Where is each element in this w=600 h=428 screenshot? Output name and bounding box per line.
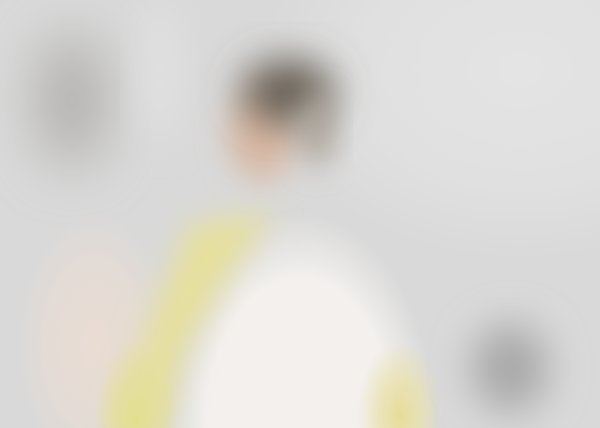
face bbox=[228, 89, 296, 181]
dark grey blob lower right bbox=[472, 324, 548, 412]
yellow scarf bbox=[115, 212, 275, 428]
hair bbox=[242, 60, 334, 124]
dark blurred object upper left bbox=[36, 34, 108, 166]
hair side bbox=[302, 94, 334, 166]
light vertical streak bbox=[142, 2, 178, 138]
